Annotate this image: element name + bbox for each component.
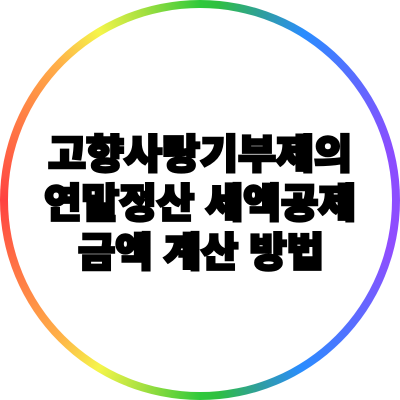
title: 금액 계산 방법 xyxy=(78,231,324,275)
title: 연말정산 세액공제 xyxy=(44,182,356,226)
title: 고향사랑기부제의 xyxy=(48,133,352,177)
